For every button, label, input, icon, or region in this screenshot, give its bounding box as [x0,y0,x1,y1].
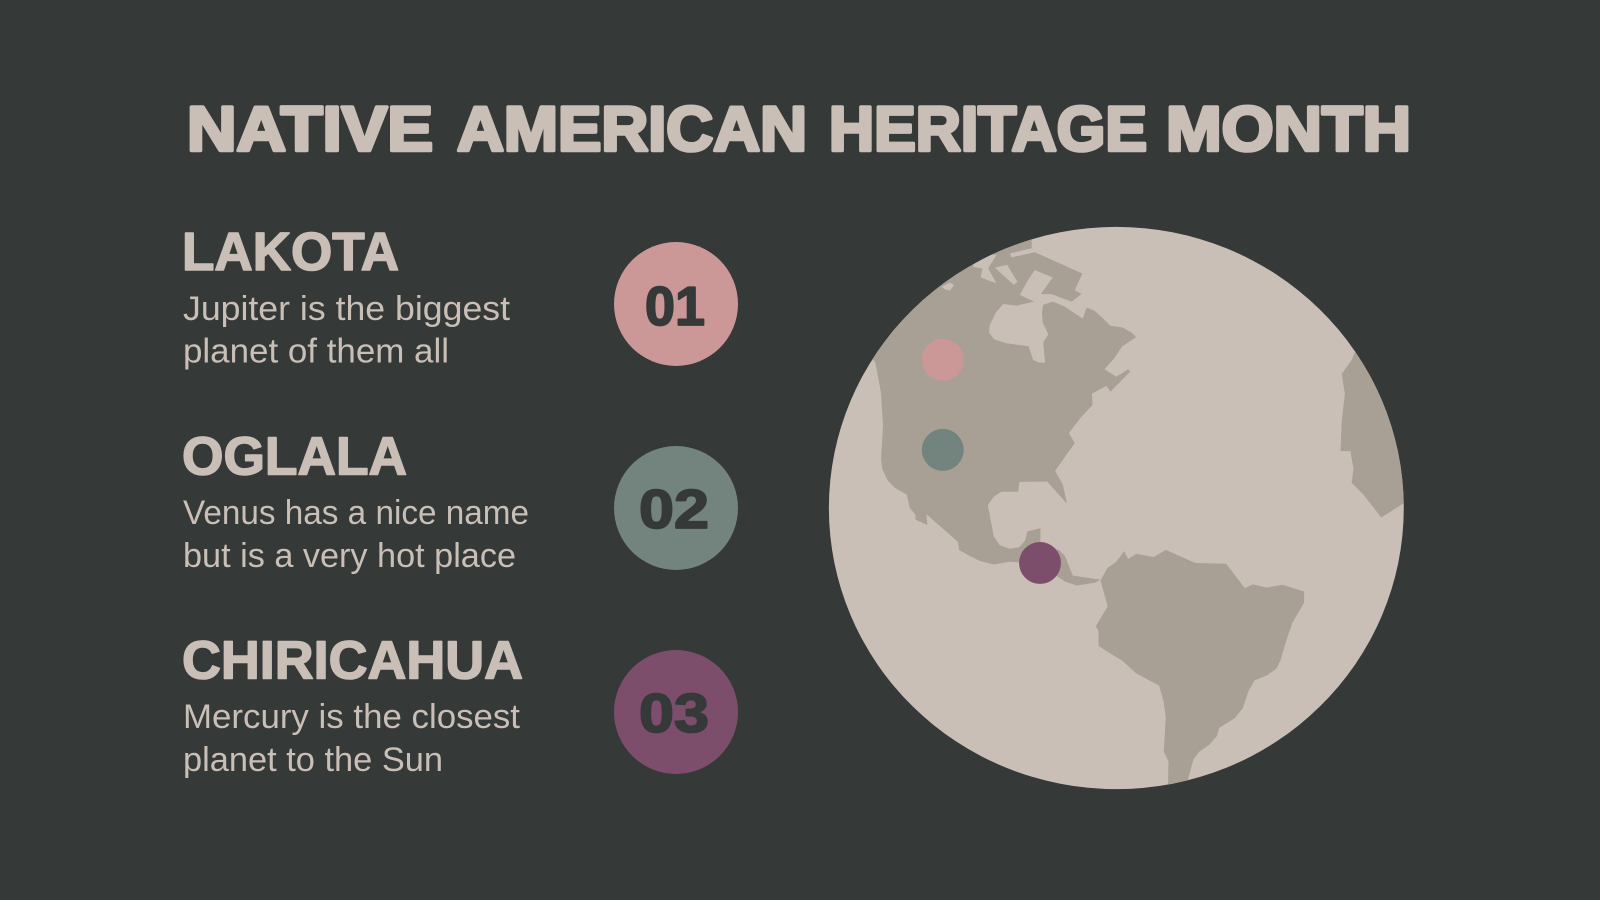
title: NATIVE [187,94,433,164]
text block: Chiricahua description: Mercury is the closest [183,698,521,736]
land: South America [1096,550,1304,793]
title: HERITAGE [829,94,1147,164]
title: AMERICAN [457,94,807,164]
title: MONTH [1166,94,1411,164]
number badge 02: 02 [639,478,709,540]
number badge 01: 01 [645,275,705,337]
marker: Lakota [922,339,964,381]
heading: Lakota: LAKOTA [182,222,399,282]
heading: Chiricahua: CHIRICAHUA [182,630,523,690]
land: North America [872,239,1136,586]
heading: Oglala: OGLALA [182,426,407,486]
text block: Oglala description: Venus has a nice name [183,494,529,532]
text block: Oglala description: but is a very hot place [183,537,516,575]
marker: Oglala [922,429,964,471]
number badge 01 [614,242,738,366]
text block: Lakota description: planet of them all [183,332,449,370]
panel: Lakota [182,222,738,370]
text block: Chiricahua description: planet to the Sun [183,741,443,779]
number badge 02 [614,446,738,570]
globe disc [829,227,1404,789]
number badge 03 [614,650,738,774]
globe map [829,224,1433,793]
marker: Chiricahua [1019,542,1061,584]
panel: Oglala [182,426,738,575]
panel: Chiricahua [182,630,738,779]
number badge 03: 03 [639,682,709,744]
arctic water channels [942,251,1017,291]
text block: Lakota description: Jupiter is the biggest [183,290,511,328]
continents [872,239,1404,784]
land: Africa [1340,352,1404,518]
